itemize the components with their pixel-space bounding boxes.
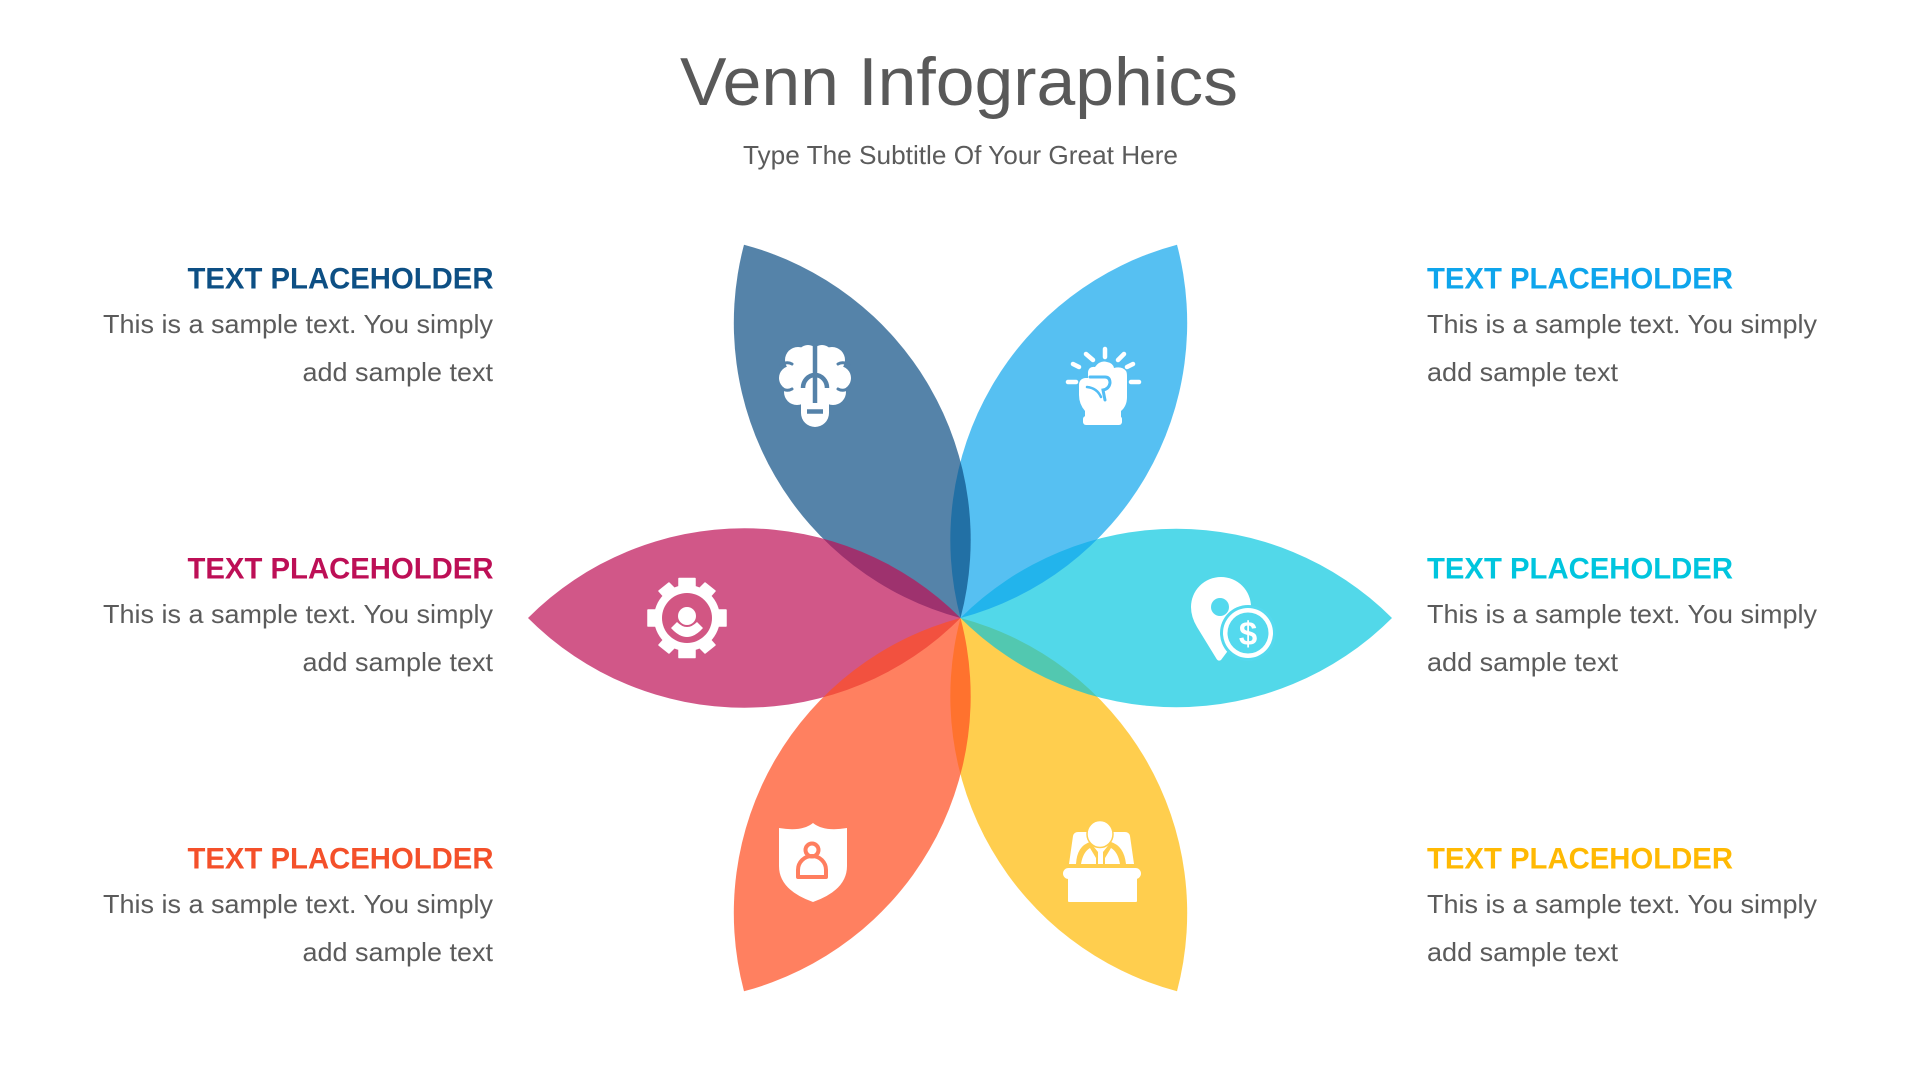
text block: yellow (1427, 842, 1817, 967)
text block: cyan (1427, 552, 1817, 677)
text block: orange: add sample text (302, 937, 494, 967)
icon: shield with person (779, 823, 847, 902)
icon: raised fist (1068, 349, 1139, 425)
text block: light blue: add sample text (1427, 357, 1619, 387)
subtitle: Type The Subtitle Of Your Great Here (743, 140, 1178, 170)
text block: navy: This is a sample text. You simply (103, 309, 493, 339)
icon: location pin with dollar coin: $ (1239, 615, 1257, 652)
petal: orange (734, 618, 971, 991)
text block: navy: add sample text (302, 357, 494, 387)
text block: orange: TEXT PLACEHOLDER (188, 842, 494, 876)
text block: cyan: This is a sample text. You simply (1427, 599, 1817, 629)
text block: cyan: TEXT PLACEHOLDER (1427, 552, 1733, 586)
text block: navy (103, 262, 494, 387)
petal: magenta (528, 528, 960, 708)
title: Venn Infographics (680, 44, 1238, 120)
text block: light blue: TEXT PLACEHOLDER (1427, 262, 1733, 296)
text block: magenta: TEXT PLACEHOLDER (188, 552, 494, 586)
petal: cyan (960, 529, 1392, 707)
petal: navy (734, 245, 971, 618)
icon: location pin with dollar coin (1191, 577, 1276, 661)
petal: light blue (950, 245, 1187, 618)
petal: yellow (950, 618, 1187, 991)
text block: orange (103, 842, 494, 967)
text block: light blue (1427, 262, 1817, 387)
text block: navy: TEXT PLACEHOLDER (188, 262, 494, 296)
text block: magenta (103, 552, 494, 677)
text block: yellow: add sample text (1427, 937, 1619, 967)
text block: light blue: This is a sample text. You simply (1427, 309, 1817, 339)
icon: speaker at podium (1063, 820, 1141, 902)
text block: magenta: This is a sample text. You simply (103, 599, 493, 629)
text block: yellow: This is a sample text. You simply (1427, 889, 1817, 919)
text block: yellow: TEXT PLACEHOLDER (1427, 842, 1733, 876)
text block: orange: This is a sample text. You simply (103, 889, 493, 919)
text block: cyan: add sample text (1427, 647, 1619, 677)
petal flower diagram (528, 245, 1392, 991)
icon: brain lightbulb (779, 345, 851, 427)
text block: magenta: add sample text (302, 647, 494, 677)
icon: gear with person (648, 578, 726, 658)
